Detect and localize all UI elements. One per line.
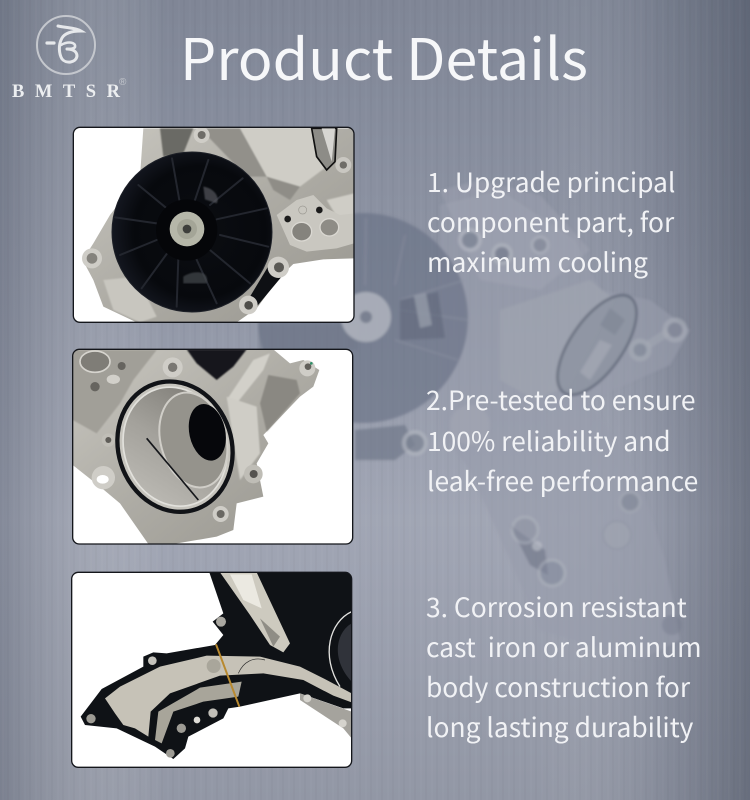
bore opening [188, 404, 226, 461]
text block: feature 2: 100% reliability and [427, 420, 671, 459]
registered mark: ® [119, 77, 127, 88]
O-ring seal [115, 379, 235, 514]
text block: feature 1 [427, 161, 675, 280]
text block: feature 2: leak-free performance [427, 460, 698, 499]
text block: feature 3: cast iron or aluminum [426, 626, 702, 665]
ghost hub [341, 292, 391, 342]
title: Product Details [180, 15, 588, 97]
pump housing [83, 128, 354, 322]
text block: feature 3 [426, 586, 702, 745]
black cover plate [81, 572, 352, 759]
bolt holes [86, 617, 347, 758]
logo monogram [47, 26, 81, 62]
ghost outlet ring [542, 283, 652, 407]
text block: feature 3: 3. Corrosion resistant [426, 586, 687, 625]
logo: BMTSR [12, 16, 127, 102]
text block: feature 2: 2.Pre-tested to ensure [426, 379, 695, 418]
pulley wheel [112, 152, 272, 312]
text block: feature 3: long lasting durability [426, 706, 694, 745]
text block: feature 1: 1. Upgrade principal [427, 161, 675, 200]
text block: feature 2 [426, 379, 698, 499]
cast channel [105, 656, 352, 737]
seal opening [338, 623, 352, 682]
logo wordmark: BMTSR [12, 82, 121, 102]
pump casting [73, 349, 319, 544]
logo ring [37, 16, 95, 74]
pulley hub [170, 212, 204, 246]
text block: feature 1: maximum cooling [427, 241, 648, 280]
text block: feature 3: body construction for [426, 666, 691, 705]
yellow band [216, 644, 239, 707]
text block: feature 1: component part, for [427, 201, 675, 240]
panel: gasket channel photo [72, 572, 352, 767]
panel: pump outlet and seal photo [73, 349, 353, 544]
panel: water pump pulley photo [73, 127, 354, 322]
ghost pump watermark [258, 180, 690, 660]
